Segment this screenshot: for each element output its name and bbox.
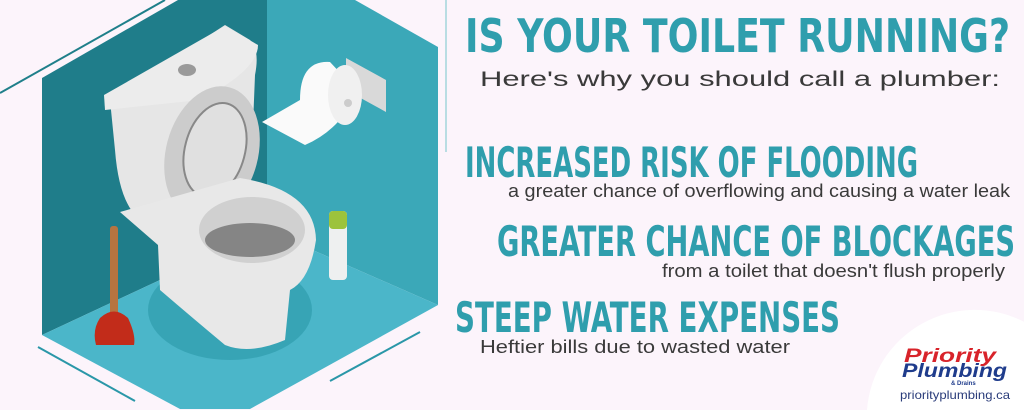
logo badge: priorityplumbing.ca	[900, 388, 1010, 402]
point 2 text: from a toilet that doesn't flush properly	[662, 261, 1005, 281]
point 3 text: Heftier bills due to wasted water	[480, 337, 790, 357]
point 1 text: a greater chance of overflowing and causing a water leak	[508, 181, 1011, 201]
illustration: bathroom with toilet	[0, 0, 438, 409]
spray can	[329, 211, 347, 280]
logo badge	[867, 310, 1024, 410]
logo badge: Plumbing	[902, 361, 1007, 382]
toilet	[104, 25, 316, 349]
logo badge: & Drains	[951, 381, 976, 387]
toilet paper	[262, 58, 386, 145]
plunger	[95, 226, 134, 345]
subtitle: Here's why you should call a plumber:	[480, 68, 1000, 91]
logo badge: Priority	[904, 346, 998, 367]
point 3 heading: STEEP WATER EXPENSES	[455, 293, 840, 342]
